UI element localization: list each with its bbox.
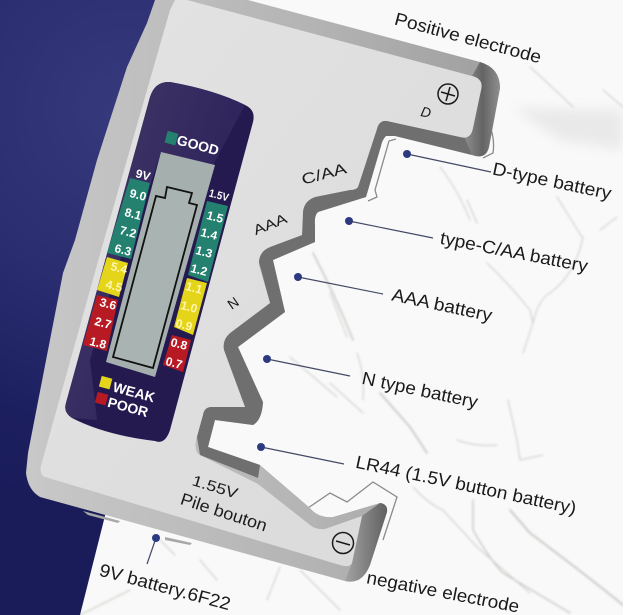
dark notch band xyxy=(197,121,472,478)
9V scale: 3.6 xyxy=(98,295,118,313)
icon: positive symbol xyxy=(438,84,458,104)
legend: good: GOOD xyxy=(175,132,221,158)
callout: 9V battery xyxy=(97,534,233,614)
9V scale: 4.5 xyxy=(104,277,124,295)
1.5V scale: 1.5 xyxy=(205,208,225,226)
slot label D: D xyxy=(419,103,433,121)
9V scale: 9V xyxy=(134,166,152,184)
positive corner xyxy=(465,62,500,156)
9V scale: 8.1 xyxy=(123,205,143,223)
callout: LR44 button battery: LR44 (1.5V button battery) xyxy=(354,452,578,518)
slot label AAA: AAA xyxy=(251,210,290,238)
callout: D-type battery xyxy=(403,150,613,203)
1.5V scale xyxy=(163,188,231,372)
9V connector pieces xyxy=(83,511,192,545)
callout: N type battery: N type battery xyxy=(360,368,480,412)
9V scale xyxy=(83,166,152,352)
panel base xyxy=(65,82,254,442)
slot label N: N xyxy=(224,294,242,312)
body shell xyxy=(26,0,500,582)
display panel xyxy=(65,82,254,442)
battery outline xyxy=(113,187,197,368)
callout: LR44 button battery xyxy=(257,443,578,518)
callout: negative electrode: negative electrode xyxy=(365,567,521,615)
9V scale: 7.2 xyxy=(118,223,138,241)
callout: N type battery xyxy=(263,355,480,412)
1.55V label: 1.55V xyxy=(190,472,240,502)
thin contact wires xyxy=(308,126,494,540)
callout: Positive electrode: Positive electrode xyxy=(392,9,544,67)
1.5V scale: 1.4 xyxy=(199,225,219,243)
9V scale: 2.7 xyxy=(93,314,113,332)
legend: poor: POOR xyxy=(106,394,150,420)
navy background panel xyxy=(0,0,235,615)
9V scale: 9.0 xyxy=(128,186,148,204)
1.5V scale: 1.1 xyxy=(184,279,204,297)
1.5V scale: 1.5V xyxy=(208,188,231,204)
9V scale: 5.4 xyxy=(109,259,129,277)
1.5V scale: 0.8 xyxy=(169,335,189,353)
silver face xyxy=(41,0,482,566)
1.5V scale: 0.9 xyxy=(174,316,194,334)
slot label C/AA: C/AA xyxy=(300,160,349,189)
9V scale: 1.8 xyxy=(88,334,108,352)
callout: type-C/AA battery xyxy=(345,217,590,276)
engraved labels on the body xyxy=(178,103,433,535)
Pile bouton label: Pile bouton xyxy=(178,490,270,535)
callout: AAA battery: AAA battery xyxy=(390,285,494,325)
negative chamfer xyxy=(345,503,387,582)
9V scale: 6.3 xyxy=(113,241,133,259)
legend: weak: WEAK xyxy=(111,379,157,405)
callout: D-type battery: D-type battery xyxy=(491,159,613,203)
1.5V scale: 0.7 xyxy=(164,354,184,372)
1.5V scale: 1.3 xyxy=(194,243,214,261)
1.5V scale: 1.0 xyxy=(179,298,199,316)
panel sheen xyxy=(65,82,245,420)
LCD window xyxy=(106,152,215,377)
callout: 9V battery: 9V battery.6F22 xyxy=(97,560,233,614)
1.5V scale: 1.2 xyxy=(189,261,209,279)
icon: negative symbol xyxy=(332,532,354,554)
callout: type-C/AA battery: type-C/AA battery xyxy=(438,228,590,276)
callout: AAA battery xyxy=(294,273,494,325)
tester body xyxy=(26,0,500,582)
